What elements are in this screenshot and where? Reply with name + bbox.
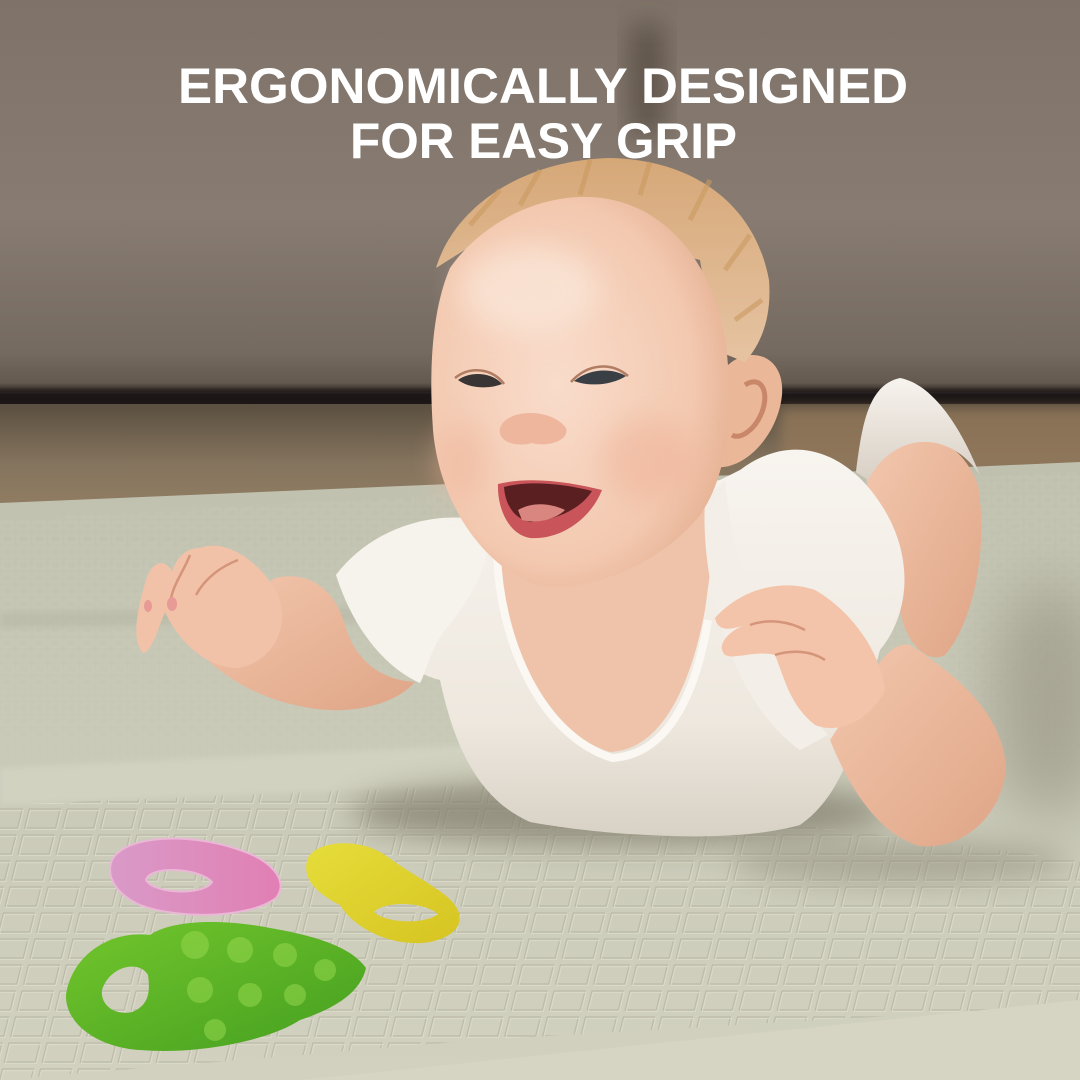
teether: yellow — [306, 843, 460, 943]
baby neck and chest — [497, 500, 720, 752]
baby left hand — [136, 546, 282, 668]
teether: pink — [110, 839, 281, 915]
baby legs and sock — [856, 378, 981, 657]
title — [178, 58, 908, 169]
baby smiling mouth — [498, 480, 602, 538]
baby body: white onesie — [336, 450, 904, 836]
title: FOR EASY GRIP — [350, 113, 737, 169]
baby left arm — [190, 576, 415, 710]
teether: green — [66, 922, 366, 1051]
baby left sleeve — [336, 519, 487, 683]
baby — [136, 158, 1006, 846]
shadow under baby — [350, 580, 1080, 884]
baby ear — [710, 355, 782, 467]
baby head — [431, 197, 729, 587]
baby eyes — [455, 366, 628, 387]
baby right arm — [715, 585, 1006, 846]
baby nose — [500, 413, 566, 445]
baby hair — [436, 158, 769, 362]
title: ERGONOMICALLY DESIGNED — [178, 58, 908, 114]
